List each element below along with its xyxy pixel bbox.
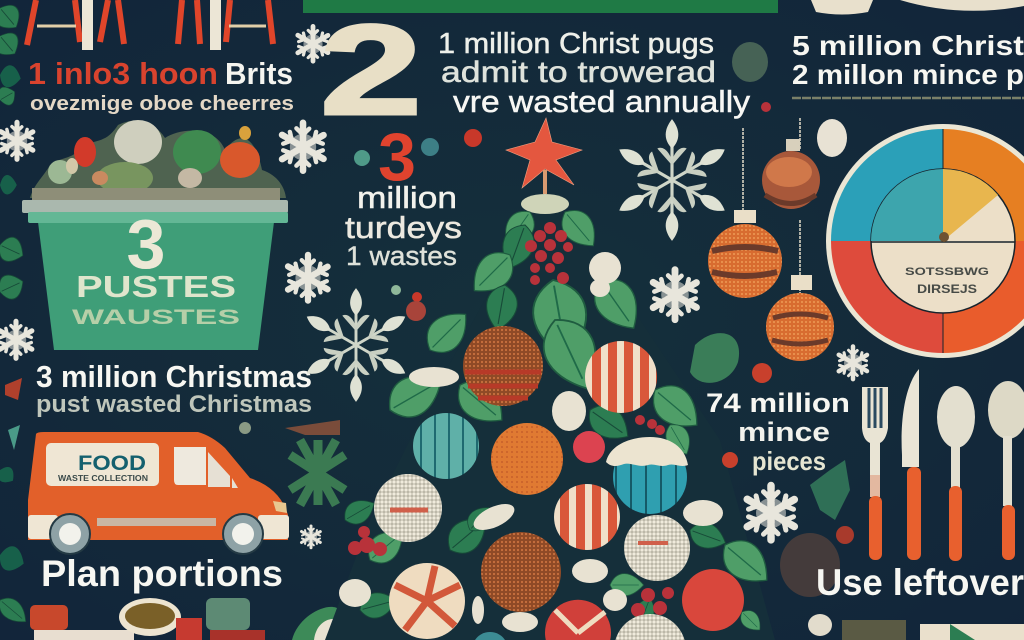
icon: red chairs bbox=[27, 0, 273, 50]
big number 2: 2 bbox=[320, 0, 422, 142]
spoon two bbox=[988, 381, 1024, 560]
van sign: FOOD bbox=[78, 452, 146, 475]
knife bbox=[902, 369, 921, 560]
text: Use leftovers: Use leftover bbox=[816, 562, 1024, 603]
star bbox=[506, 118, 582, 188]
bin label: PUSTES bbox=[76, 269, 236, 304]
text: 5 million Christmas puddings: 2 millon mince p bbox=[792, 59, 1024, 90]
icon: food delivery van bbox=[28, 432, 289, 554]
fork bbox=[862, 387, 888, 560]
foliage beside van bbox=[5, 378, 345, 505]
text: 74 million mince pieces: mince bbox=[738, 417, 830, 447]
food pile bbox=[30, 120, 286, 200]
pie chart bbox=[826, 124, 1024, 358]
van wheels bbox=[50, 514, 263, 554]
decorative snowflakes left bbox=[0, 26, 328, 548]
bin label: WAUSTES bbox=[72, 306, 240, 329]
text: 74 million mince pieces bbox=[706, 388, 850, 476]
text: 1 million Christ pugs: admit to trowerad bbox=[441, 56, 716, 89]
icon: bin of food waste bbox=[22, 120, 288, 350]
ornament: teal ribbed bbox=[413, 413, 479, 479]
red berries bbox=[348, 222, 674, 630]
text: 74 million mince pieces: pieces bbox=[752, 446, 826, 476]
ornament: small red bbox=[573, 431, 605, 463]
top green garland strip bbox=[303, 0, 778, 13]
text: 1 million Christ pugs bbox=[438, 28, 751, 119]
text: 3 million turkeys wasted bbox=[345, 119, 462, 271]
text: 5 million Christmas puddings: 5 million Christ bbox=[792, 30, 1024, 61]
large snowflake left of tree bbox=[300, 288, 412, 402]
snowy white clumps bbox=[339, 252, 723, 632]
small decorations near 3 bbox=[354, 129, 482, 321]
ornament: white dotted right bbox=[624, 515, 690, 581]
heading: 1 in 3 Brits: ovezmige oboe cheerres bbox=[30, 93, 294, 115]
bottom right card bbox=[920, 624, 1024, 640]
bauble one bbox=[762, 151, 820, 209]
heading: 1 in 3 Brits: 1 inlo3 hoon bbox=[28, 56, 218, 91]
text: 74 million mince pieces: 74 million bbox=[706, 388, 850, 418]
ornament: red bauble bbox=[682, 569, 744, 631]
ornament: brown striped bbox=[463, 326, 543, 406]
ornament: brown dotted bbox=[481, 532, 561, 612]
large snowflake right of star bbox=[612, 119, 732, 241]
van windows bbox=[174, 447, 206, 485]
text: 1 million Christ pugs: 1 million Christ pugs bbox=[438, 28, 714, 60]
ornament: striped lower bbox=[554, 484, 620, 550]
top right bowl fragments bbox=[811, 0, 1024, 14]
text: 3 million Christmas: 3 million Christmas bbox=[36, 359, 312, 394]
ornament: radial red bbox=[545, 600, 611, 640]
pie chart label bbox=[905, 266, 989, 296]
bin rim bbox=[22, 200, 288, 213]
heading: 1 in 3 Brits bbox=[28, 56, 294, 115]
ornament: teal bottom bbox=[475, 632, 505, 640]
van bumpers bbox=[28, 515, 58, 539]
van sign bbox=[46, 443, 159, 486]
tree leaves bbox=[339, 202, 779, 636]
van sign: WASTE COLLECTION bbox=[58, 474, 148, 483]
text: 3 million turkeys wasted: turdeys bbox=[345, 210, 462, 245]
heading: 1 in 3 Brits: Brits bbox=[225, 56, 293, 91]
cream blob bbox=[817, 119, 847, 157]
text: 3 million turkeys wasted: 3 bbox=[378, 119, 416, 195]
pie chart label: SOTSSBWG bbox=[905, 266, 989, 278]
left edge foliage bbox=[0, 0, 32, 629]
small foliage centre right bbox=[690, 333, 906, 640]
tree underlay bbox=[325, 190, 775, 640]
text: 3 million turkeys wasted: million bbox=[357, 180, 457, 215]
bin label: 3 bbox=[127, 205, 165, 283]
bauble three bbox=[766, 293, 834, 361]
text: 1 million Christ pugs: vre wasted annually bbox=[453, 84, 751, 119]
ornament: red striped bbox=[585, 341, 657, 413]
text: 3 million Christmas bbox=[36, 359, 312, 418]
ornament: teal with icing bbox=[606, 437, 688, 514]
text: 3 million Christmas: pust wasted Christmas bbox=[36, 391, 312, 418]
bin label bbox=[72, 205, 240, 329]
decorative snowflakes centre right bbox=[653, 270, 867, 540]
cutlery bbox=[862, 369, 1024, 561]
bauble two bbox=[708, 224, 782, 298]
tree top snow bbox=[521, 194, 569, 214]
ornament: white bottom bbox=[615, 614, 685, 640]
bottom left food illustrations bbox=[30, 598, 340, 640]
pie chart label: DIRSEJS bbox=[917, 282, 977, 296]
text: Plan portions: Plan portions bbox=[41, 553, 283, 594]
van side strip bbox=[97, 518, 216, 526]
ornament: white dotted bbox=[374, 474, 442, 542]
text: 5 million Christmas puddings bbox=[792, 30, 1024, 98]
ornament: orange bbox=[491, 423, 563, 495]
hanging orange baubles bbox=[708, 42, 847, 361]
tree bbox=[325, 118, 779, 640]
spoon one bbox=[937, 386, 975, 561]
ornament: radial cream bbox=[389, 563, 465, 639]
text: 3 million turkeys wasted: 1 wastes bbox=[346, 241, 457, 271]
bin body bbox=[38, 222, 274, 350]
